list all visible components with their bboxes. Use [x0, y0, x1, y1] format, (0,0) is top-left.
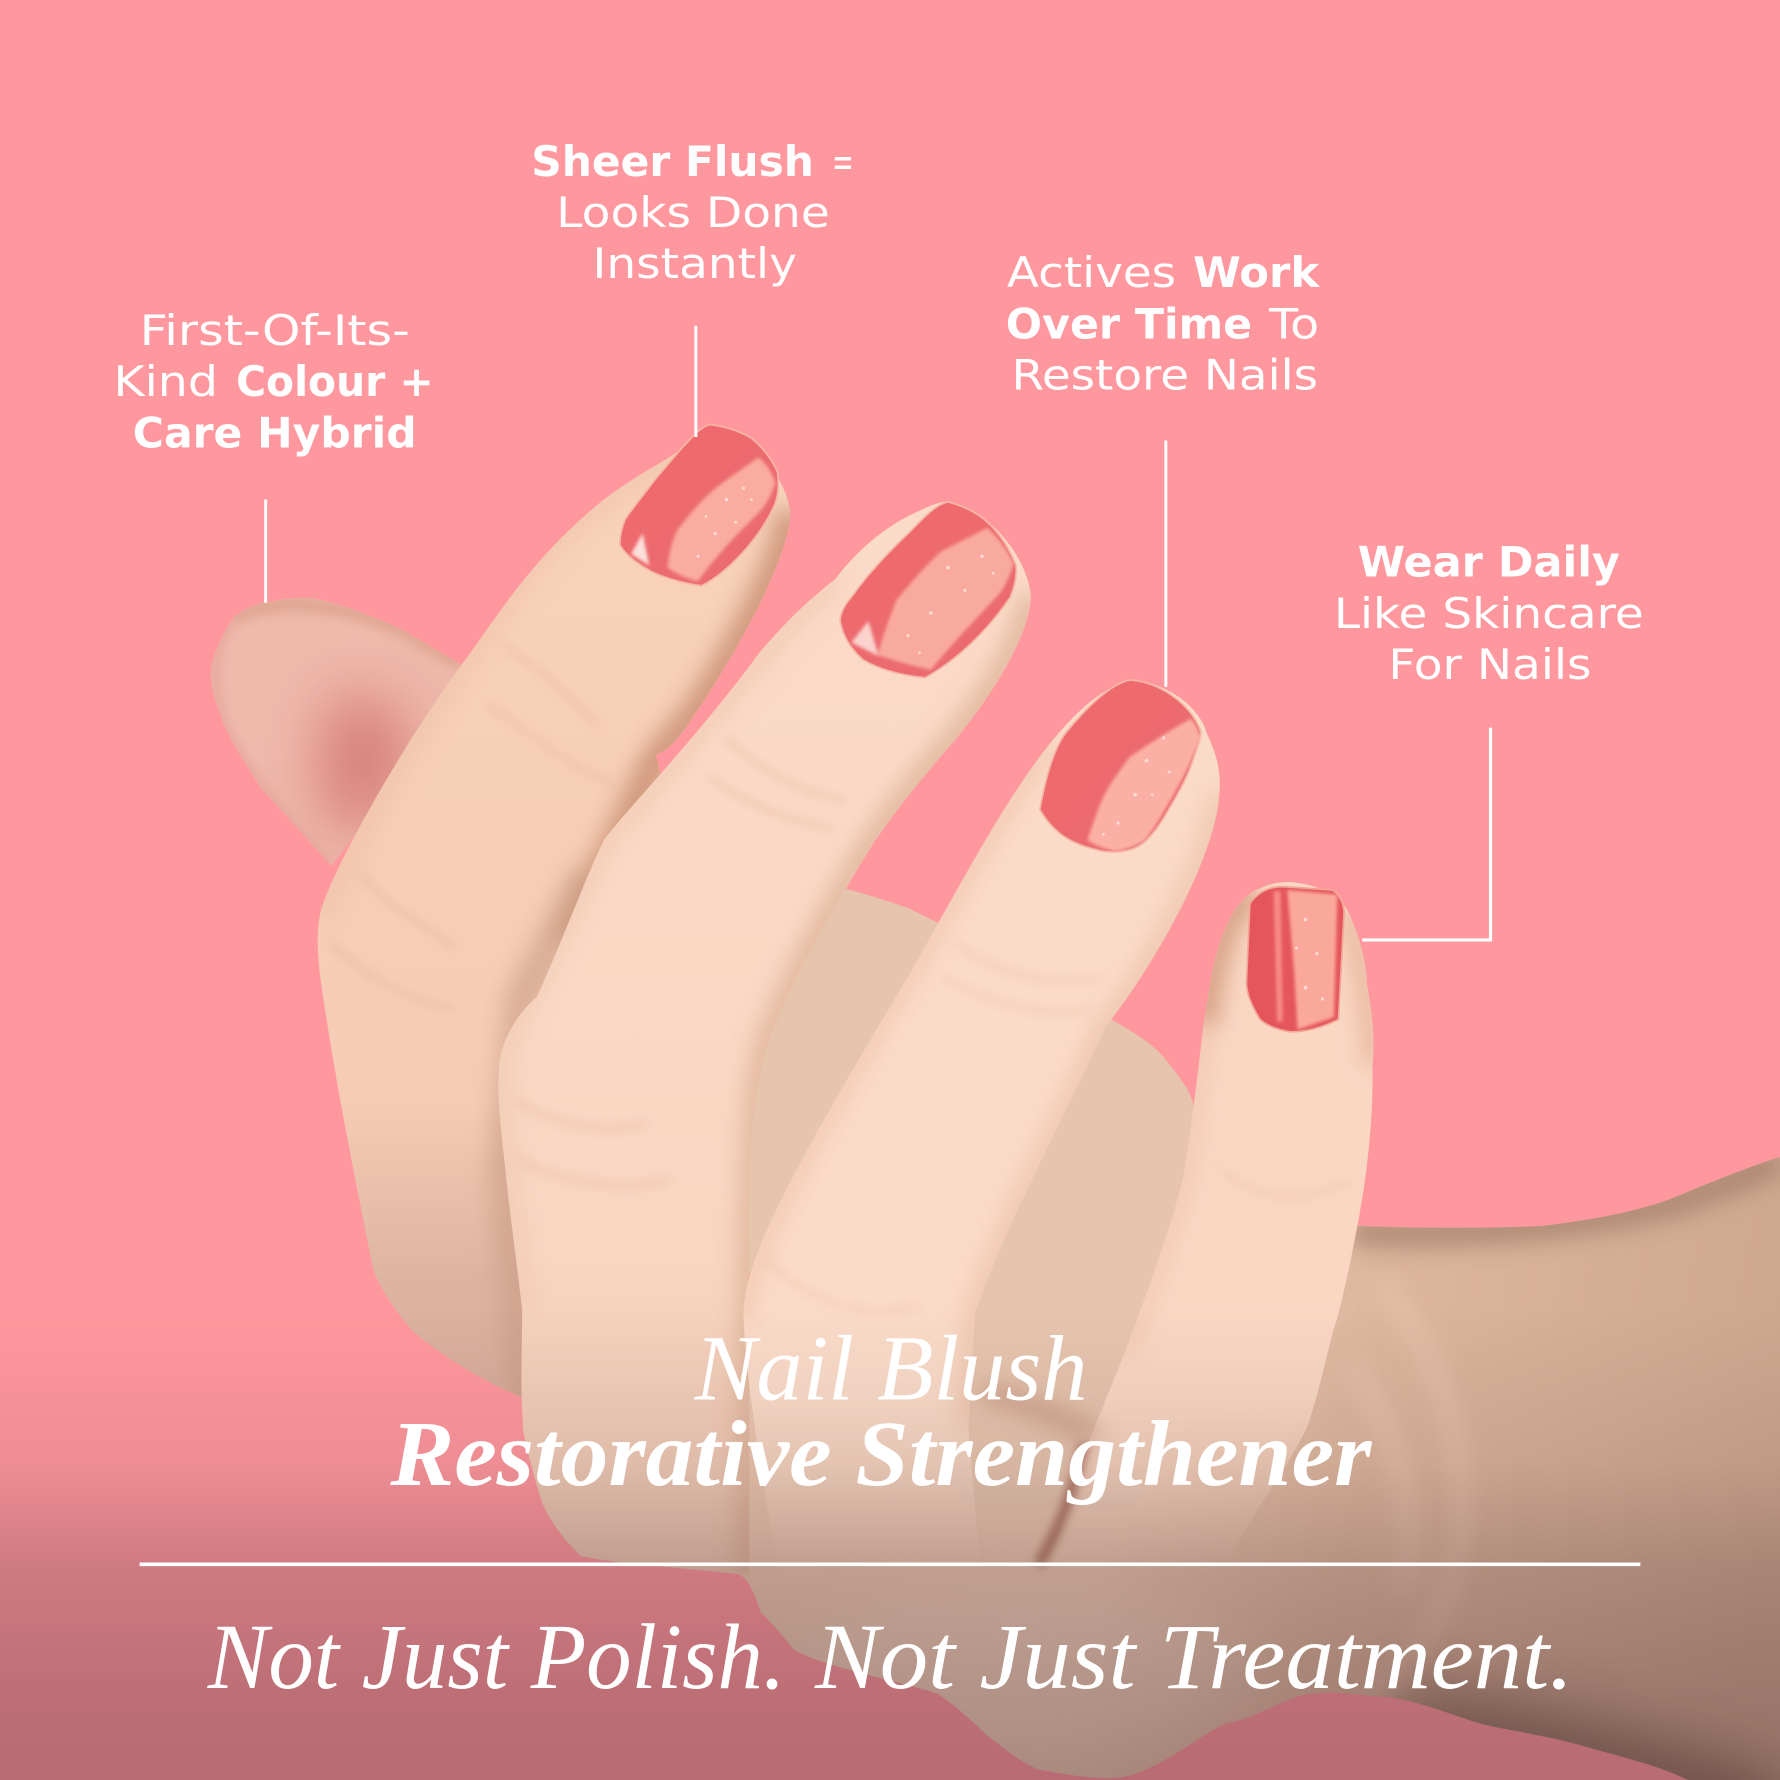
- callout: first of its kind: Care Hybrid: [133, 408, 417, 457]
- index nail glint: [631, 534, 649, 565]
- thumb rim left: [215, 618, 331, 866]
- thumb shadow: [319, 692, 410, 840]
- callout: actives: To: [1268, 299, 1319, 348]
- ring left edge: [743, 744, 1050, 1321]
- index finger: [318, 425, 790, 1408]
- wrist and back of hand: [740, 1156, 1780, 1780]
- ring nail sheen: [1088, 719, 1201, 851]
- callout: actives: Restore Nails: [1011, 350, 1318, 399]
- nail: pinky: [1246, 887, 1344, 1032]
- callout: sheer flush: =: [832, 137, 854, 186]
- callout: wear daily: Wear Daily: [1358, 538, 1620, 587]
- callout: actives: Actives: [1007, 248, 1176, 297]
- tagline: Not Just Treatment.: [814, 1606, 1573, 1709]
- callout: wear daily: Like Skincare: [1334, 589, 1644, 638]
- callout: first of its kind: Colour +: [236, 357, 434, 406]
- pinky nail highlight: [1274, 891, 1283, 1022]
- ring creases: [766, 942, 1101, 1311]
- divider: [140, 1563, 1640, 1566]
- lower hand soft light: [783, 1589, 1260, 1748]
- wrist top shadow band: [1351, 1160, 1780, 1233]
- leader line: actives: [1165, 440, 1167, 687]
- pinky finger: [1081, 882, 1374, 1522]
- index shadow right edge: [568, 511, 790, 942]
- thumb rim top: [234, 604, 461, 664]
- ring finger: [743, 681, 1220, 1589]
- product title: Nail Blush: [694, 1318, 1088, 1421]
- wrist fold highlights: [1351, 1283, 1461, 1691]
- nail: ring: [1040, 680, 1201, 852]
- wrist lower dark edge: [1396, 1726, 1780, 1780]
- ring right edge: [968, 795, 1219, 1428]
- middle creases: [517, 738, 846, 1185]
- nail: index: [620, 425, 778, 586]
- callout: first of its kind: Kind: [114, 357, 218, 406]
- bottom dark gradient overlay: [0, 1305, 1780, 1780]
- product title: [389, 1318, 1372, 1506]
- shadow between ring and pinky: [1039, 1444, 1084, 1564]
- callout: wear daily: [1334, 538, 1644, 689]
- callout: first of its kind: First-Of-Its-: [140, 306, 410, 355]
- nail: middle: [840, 502, 1016, 678]
- callout: actives: Work: [1193, 248, 1320, 297]
- tagline: Not Just Polish.: [207, 1606, 786, 1709]
- middle shadow right edge: [749, 596, 1031, 1576]
- callout: sheer flush: Sheer Flush: [531, 137, 814, 186]
- callout: actives: Over Time: [1006, 299, 1252, 348]
- callout: actives: [1006, 248, 1320, 399]
- callout: sheer flush: Instantly: [593, 239, 797, 288]
- callout: sheer flush: Looks Done: [556, 188, 830, 237]
- knuckle web shadow: [982, 1391, 1095, 1436]
- middle nail sheen: [878, 528, 1014, 670]
- leader line: first of its kind: [264, 499, 267, 603]
- callout: wear daily: For Nails: [1388, 640, 1592, 689]
- middle nail glint: [851, 621, 879, 656]
- mid palm behind fingers: [636, 817, 1206, 1510]
- middle finger: [498, 502, 1031, 1576]
- index nail sheen: [668, 457, 775, 581]
- leader line: sheer flush: [695, 326, 697, 437]
- callout: sheer flush: [531, 137, 854, 288]
- index creases: [329, 647, 613, 1010]
- callout: first of its kind: [114, 306, 434, 457]
- product title: Restorative Strengthener: [389, 1403, 1372, 1506]
- pinky left edge: [1203, 891, 1254, 1026]
- pinky crease: [1220, 1169, 1351, 1196]
- photo: hand with painted nails: [211, 425, 1780, 1780]
- pinky right edge: [1347, 910, 1373, 1065]
- nail sparkles: [697, 487, 1324, 1001]
- shadow next to middle finger: [505, 874, 590, 1408]
- index left edge: [320, 446, 685, 914]
- thumb finger behind: [211, 598, 461, 866]
- middle left edge: [500, 579, 836, 1310]
- pinky nail sheen: [1287, 890, 1337, 1030]
- leader line: wear daily: [1362, 728, 1491, 940]
- tagline: [207, 1606, 1573, 1709]
